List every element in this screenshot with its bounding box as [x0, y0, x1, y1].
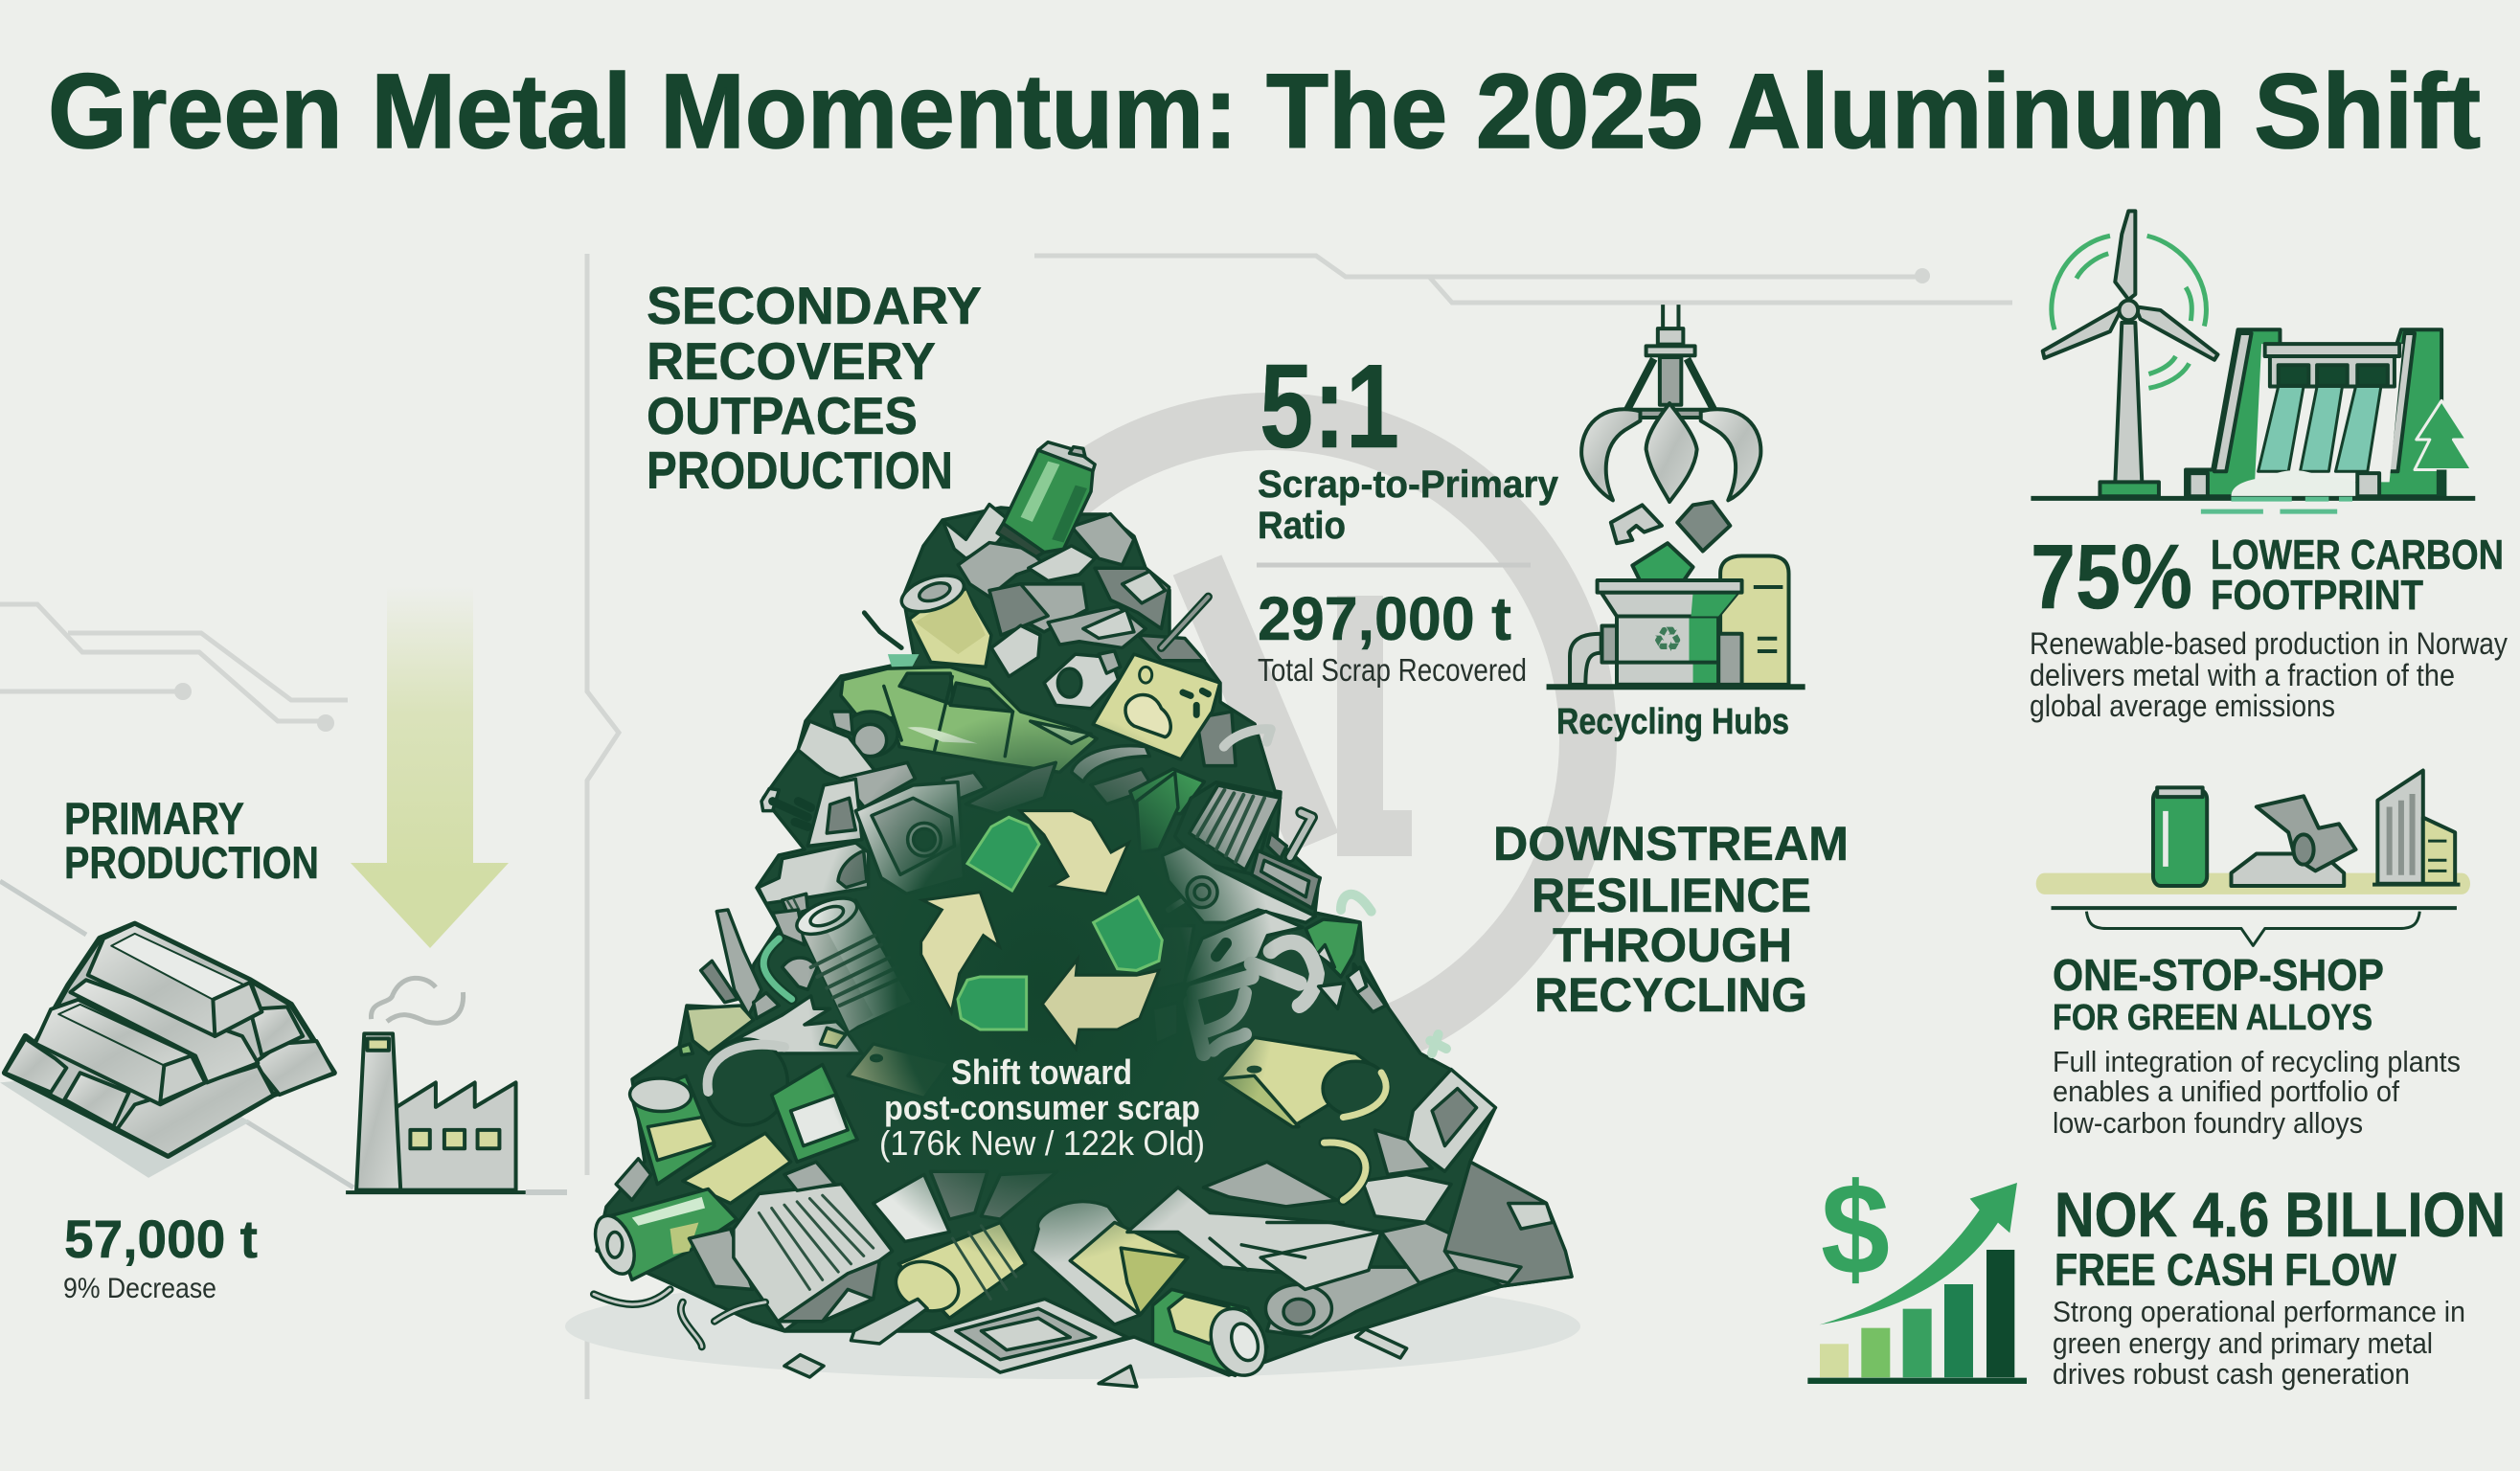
title: Green Metal Momentum: The 2025 Aluminum Shift: [48, 53, 2481, 170]
heading: downstream resilience through recycling: RESILIENCE: [1532, 869, 1811, 922]
icon: recycle mark on shredder: ♻: [1652, 621, 1683, 660]
callout: shift toward post-consumer scrap: Shift toward: [951, 1052, 1132, 1092]
text: cash flow description: green energy and primary metal: [2053, 1326, 2433, 1360]
text: integration description: Full integration of recycling plants: [2053, 1045, 2461, 1078]
panel: primary production: [0, 586, 526, 1304]
circuit lines: left: [0, 604, 567, 1192]
panel: scrap ratio stats: [1257, 341, 1559, 688]
text: renewable production description: delivers metal with a fraction of the: [2030, 658, 2455, 692]
heading: secondary recovery outpaces production: OUTPACES: [647, 386, 918, 445]
text: integration description: low-carbon foundry alloys: [2053, 1106, 2363, 1140]
icon: recycling hub claw and shredder: [1547, 305, 1805, 687]
arrow: downward production decline: [351, 586, 509, 948]
illustration: scrap metal pile: [565, 442, 1580, 1387]
stat: 297,000 t: 297,000 t: [1258, 584, 1511, 653]
item group: right side of pile: [1137, 773, 1446, 1053]
item group: top of pile: [798, 442, 1271, 814]
panel: free cash flow: [1807, 1156, 2506, 1391]
callout: shift toward post-consumer scrap: (176k New / 122k Old): [879, 1123, 1205, 1163]
heading: secondary recovery outpaces production: SECONDARY: [647, 276, 982, 335]
glow: dark centre behind recycle symbol: [807, 709, 1277, 1264]
label: 9% decrease: 9% Decrease: [63, 1273, 216, 1304]
heading: downstream resilience through recycling: DOWNSTREAM: [1493, 817, 1849, 871]
callout: shift toward post-consumer scrap: post-consumer scrap: [884, 1088, 1200, 1127]
stat: 75%: 75%: [2031, 526, 2192, 628]
icon: wind turbine and hydro dam: [2031, 211, 2475, 511]
heading: downstream resilience through recycling: RECYCLING: [1534, 968, 1807, 1022]
label: one-stop-shop for green alloys: FOR GREEN ALLOYS: [2053, 998, 2372, 1038]
divider: vertical chevron line: [587, 254, 619, 1399]
stat: 5:1: 5:1: [1260, 341, 1399, 473]
label: total scrap recovered: Total Scrap Recovered: [1258, 652, 1527, 688]
watermark: grey AL circle logo: [952, 421, 1588, 1057]
label: recycling hubs: Recycling Hubs: [1556, 702, 1789, 742]
text: renewable production description: global average emissions: [2030, 689, 2335, 723]
heading: secondary recovery outpaces production: PRODUCTION: [647, 441, 953, 500]
heading: primary production: PRIMARY: [64, 793, 244, 844]
icon: alloy products on shelf: [2036, 771, 2470, 945]
heading: downstream resilience through recycling: THROUGH: [1553, 918, 1792, 972]
item group: bottom of pile: [589, 1037, 1572, 1387]
heading: primary production: PRODUCTION: [64, 837, 319, 888]
heading: secondary recovery outpaces production: RECOVERY: [647, 331, 936, 391]
icon: rising bars chart: [1807, 1183, 2027, 1384]
icon: aluminum ingot stack: [0, 924, 334, 1178]
label: scrap-to-primary ratio: Scrap-to-Primary: [1258, 464, 1559, 506]
label: scrap-to-primary ratio: Ratio: [1258, 505, 1346, 547]
icon: dollar sign: $: [1821, 1156, 1890, 1301]
item group: left side of pile: [680, 779, 965, 1055]
label: lower carbon footprint: FOOTPRINT: [2211, 572, 2423, 619]
label: one-stop-shop for green alloys: ONE-STOP-SHOP: [2053, 950, 2384, 1000]
panel: lower carbon footprint: [2030, 211, 2508, 723]
icon: recycling symbol: [921, 811, 1162, 1049]
panel: one-stop-shop: [2036, 771, 2470, 1140]
icon: factory: [346, 978, 526, 1192]
text: cash flow description: Strong operational performance in: [2053, 1295, 2465, 1328]
stat: 57,000 t: 57,000 t: [64, 1209, 258, 1269]
text: integration description: enables a unified portfolio of: [2053, 1075, 2399, 1108]
text: cash flow description: drives robust cash generation: [2053, 1357, 2410, 1391]
stat: NOK 4.6 billion free cash flow: FREE CASH FLOW: [2055, 1244, 2397, 1295]
circuit lines: top: [1034, 256, 2012, 303]
